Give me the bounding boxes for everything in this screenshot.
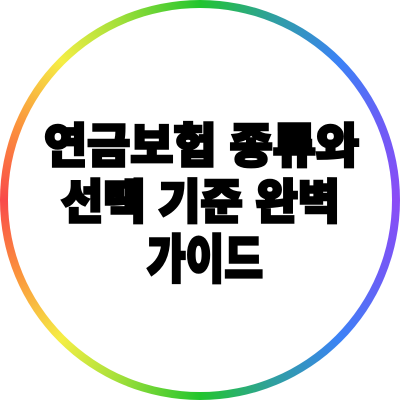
title line 3: 가이드 [147,232,263,290]
title line 2: 선택 기준 완벽 [61,176,340,228]
title line 1: 연금보험 종류와 [44,120,359,172]
